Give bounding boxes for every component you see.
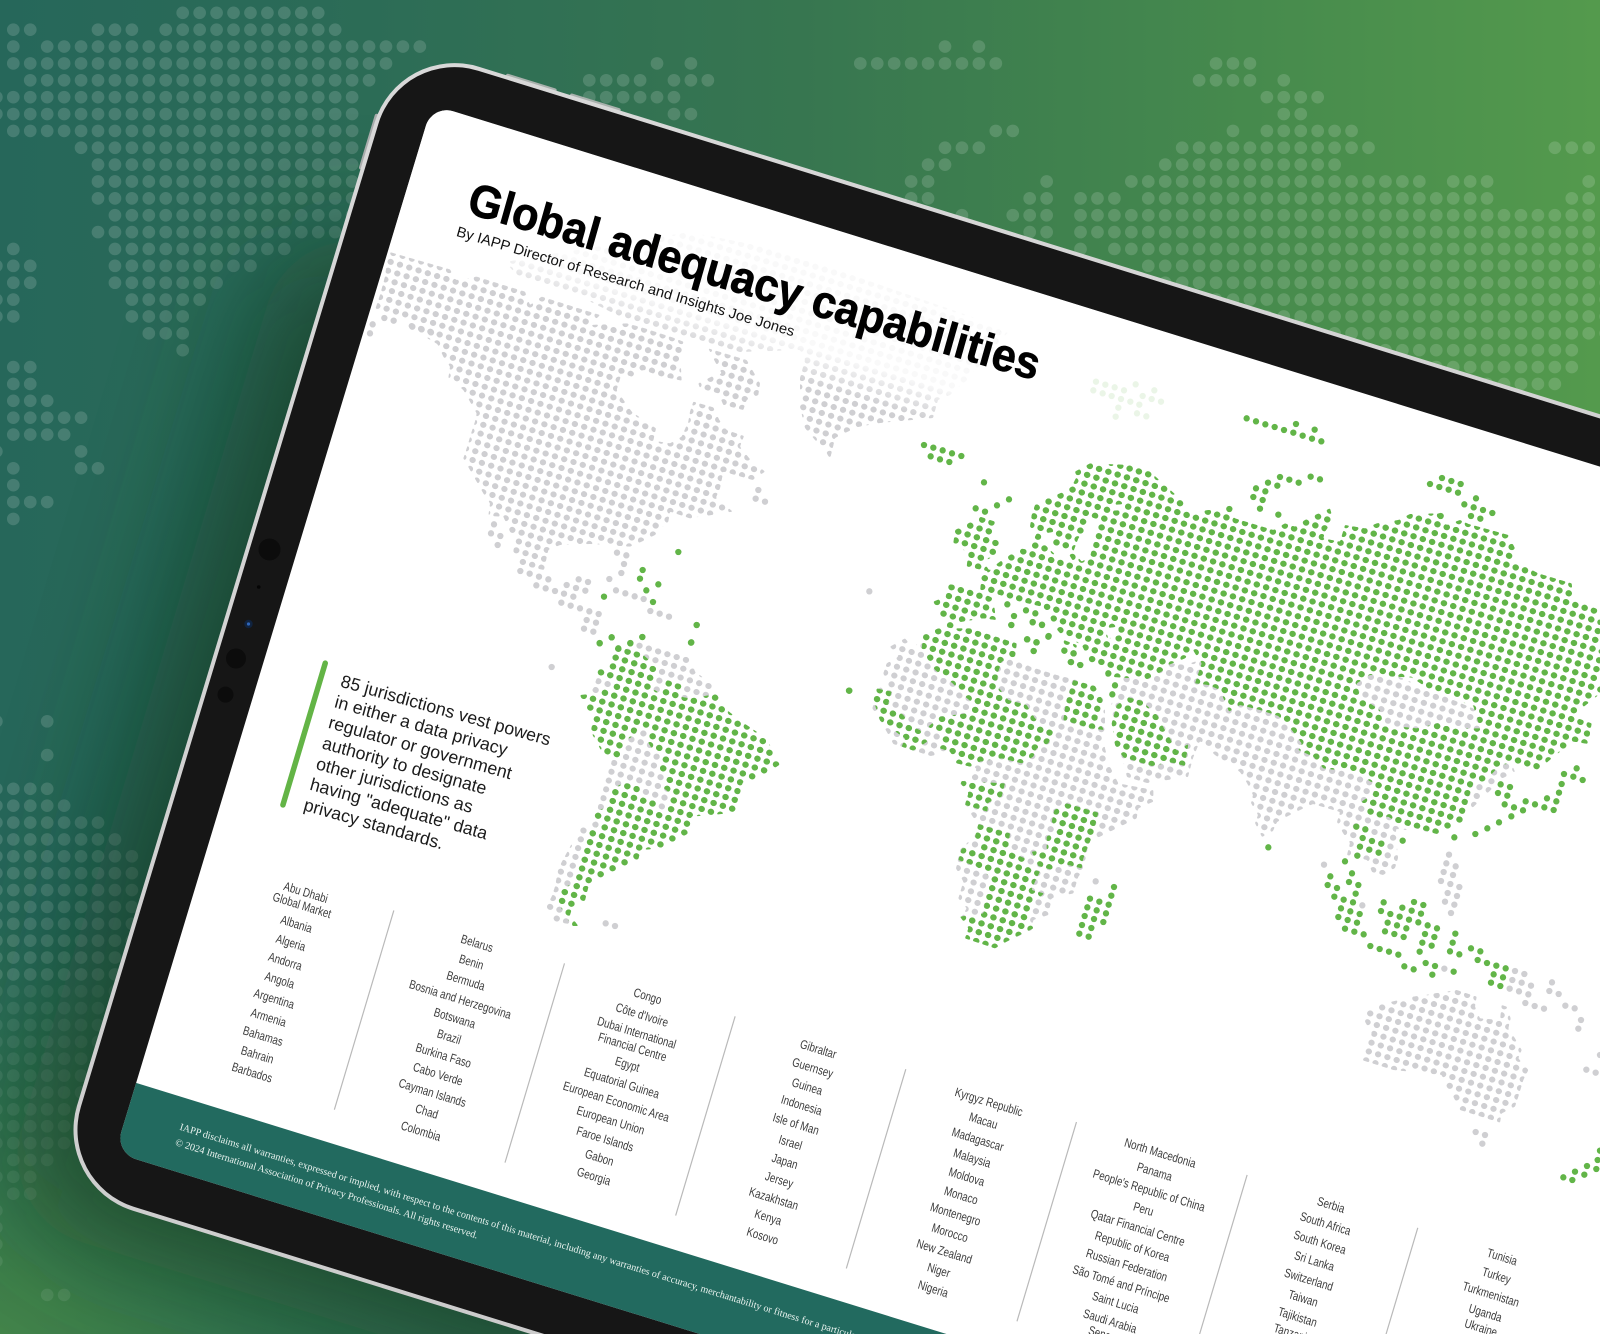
column 4: Guernsey (790, 1056, 835, 1081)
map: gray land dots (376, 252, 1528, 1122)
map: gray island dots (370, 318, 1600, 1144)
column 6: North Macedonia (1123, 1136, 1198, 1171)
column 2: Chad (414, 1102, 440, 1122)
column 3 (539, 974, 703, 1200)
column 3: European Economic Area (561, 1080, 671, 1125)
column 3: Gabon (583, 1148, 615, 1169)
column 7: South Korea (1292, 1229, 1348, 1258)
column 2: Bermuda (445, 969, 487, 994)
world map (366, 252, 1600, 1184)
column 5: Monaco (942, 1185, 979, 1208)
column 2: Colombia (399, 1119, 443, 1145)
column 1: Barbados (230, 1061, 274, 1086)
callout text: privacy standards. (302, 795, 446, 853)
column 4: Guinea (790, 1076, 824, 1099)
column 1: Albania (279, 914, 314, 936)
column 6: Peru (1131, 1200, 1155, 1219)
column 2 (368, 922, 530, 1154)
column 2: Botswana (432, 1006, 477, 1032)
callout text (302, 676, 550, 849)
column 6: Panama (1135, 1161, 1174, 1184)
column 4: Isle of Man (771, 1111, 820, 1138)
column 6: São Tomé and Príncipe (1071, 1263, 1171, 1306)
top button two (569, 93, 621, 113)
column 3: European Union (575, 1104, 646, 1138)
column 5: Kyrgyz Republic (953, 1086, 1025, 1120)
callout: jurisdictions statement (280, 660, 550, 849)
column 5: Niger (925, 1261, 952, 1281)
column 8: Turkey (1480, 1266, 1513, 1287)
column 4: Jersey (763, 1170, 795, 1191)
column 5: Morocco (930, 1222, 969, 1246)
column 2: Brazil (435, 1028, 462, 1048)
column 5: Moldova (947, 1166, 987, 1190)
column 4: Kazakhstan (747, 1185, 800, 1213)
column 2: Cayman Islands (397, 1077, 468, 1110)
column 5: Montenegro (929, 1201, 982, 1229)
column 1: Bahrain (239, 1044, 275, 1067)
map: green adequacy jurisdiction dots (558, 463, 1600, 948)
column 3: Faroe Islands (575, 1125, 635, 1155)
column 1 (232, 882, 332, 1082)
column 6: People's Republic of China (1091, 1168, 1207, 1215)
column 1: Argentina (252, 987, 296, 1012)
column 2: Bosnia and Herzegovina (407, 978, 513, 1023)
column 7: South Africa (1298, 1210, 1353, 1239)
callout accent bar (283, 663, 325, 805)
footer legal text: © 2024 International Association of Privacy Professionals. All rights reserved. (174, 1137, 479, 1242)
column 1: Algeria (274, 933, 308, 955)
footer band (108, 1081, 1600, 1334)
column 6 (1048, 1130, 1218, 1334)
column 3: Dubai International (596, 1015, 677, 1052)
map: green island dots (600, 382, 1600, 1180)
white fade over northern map under the title (390, 110, 1164, 420)
column 5: Malaysia (952, 1147, 993, 1171)
column 7: Switzerland (1283, 1267, 1334, 1294)
column 5: Macau (967, 1111, 999, 1132)
title: Global adequacy capabilities (463, 172, 1047, 390)
column 1: Bahamas (241, 1024, 285, 1050)
column 6: Saint Lucia (1090, 1290, 1141, 1317)
callout text: authority to designate (320, 733, 489, 798)
column 5: New Zealand (915, 1237, 973, 1267)
column 1: Armenia (249, 1006, 288, 1030)
column 5 (897, 1086, 1025, 1307)
column 2: Benin (457, 953, 485, 973)
column 1: Global Market (271, 891, 333, 922)
column 5: Madagascar (950, 1126, 1005, 1155)
callout text: in either a data privacy (333, 692, 510, 760)
column 4 (736, 1036, 844, 1251)
column 3: Financial Centre (596, 1031, 668, 1065)
callout text: regulator or government (326, 712, 514, 783)
column 4: Japan (770, 1152, 799, 1172)
column 4: Indonesia (779, 1093, 824, 1119)
side button (359, 113, 379, 170)
column 3: Côte d'Ivoire (614, 1001, 670, 1030)
column 2: Cabo Verde (411, 1061, 464, 1089)
column 3: Georgia (575, 1166, 613, 1189)
column 7: Tajikistan (1276, 1305, 1318, 1330)
column 1: Andorra (267, 951, 304, 974)
column 3: Congo (632, 986, 663, 1008)
column 8 (1451, 1243, 1532, 1334)
column 1: Abu Dhabi (282, 880, 329, 906)
column 6: Russian Federation (1084, 1247, 1169, 1285)
top button one (505, 73, 557, 93)
column 4: Gibraltar (798, 1038, 838, 1062)
column 2: Belarus (459, 933, 495, 956)
subtitle: By IAPP Director of Research and Insights Joe Jones (455, 224, 796, 340)
column 4: Kosovo (745, 1226, 780, 1248)
column 2: Burkina Faso (414, 1041, 473, 1071)
column 8: Uganda (1467, 1302, 1504, 1325)
column 3: Equatorial Guinea (582, 1066, 661, 1102)
column 4: Kenya (753, 1208, 784, 1229)
column 7 (1265, 1191, 1359, 1334)
column 7: Taiwan (1287, 1288, 1319, 1310)
callout text: 85 jurisdictions vest powers (339, 671, 553, 750)
column 6: Qatar Financial Centre (1089, 1208, 1186, 1249)
column 1: Angola (263, 970, 296, 992)
column 4: Israel (777, 1133, 803, 1153)
icon: front camera sensors (218, 538, 280, 703)
column dividers (334, 910, 1418, 1334)
column 7: Sri Lanka (1293, 1249, 1336, 1274)
column 7: Serbia (1315, 1195, 1347, 1217)
column 5: Nigeria (916, 1279, 950, 1301)
column 8: Turkmenistan (1461, 1280, 1521, 1310)
column 8: Tunisia (1485, 1247, 1519, 1269)
jurisdiction list (219, 872, 1532, 1334)
callout text: having "adequate" data (308, 774, 490, 843)
column 3: Egypt (613, 1055, 642, 1075)
callout text: other jurisdictions as (314, 753, 475, 817)
column 6: Republic of Korea (1093, 1229, 1172, 1265)
